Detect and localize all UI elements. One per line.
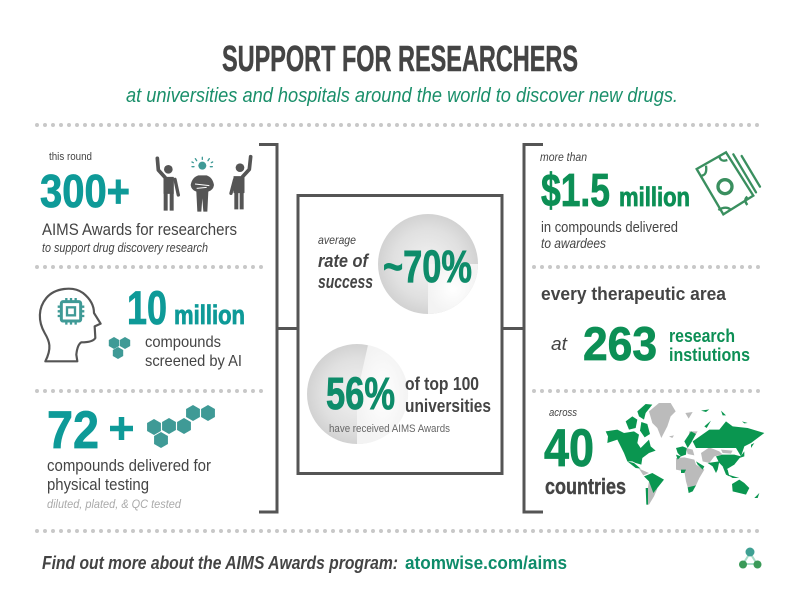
compounds delivered text: physical testing bbox=[47, 476, 149, 494]
map: americas bbox=[606, 403, 676, 505]
at label: at bbox=[551, 334, 568, 354]
icon: person left bbox=[157, 158, 178, 211]
research institutions: research bbox=[669, 326, 735, 346]
chart: 56% pie bbox=[307, 344, 408, 444]
received awards note: have received AIMS Awards bbox=[329, 423, 450, 435]
70 percent figure: ~70% bbox=[383, 241, 472, 292]
icon: person right bbox=[231, 157, 251, 209]
world map bbox=[606, 403, 764, 505]
compounds delivered text bbox=[47, 457, 211, 494]
million word: million bbox=[174, 300, 245, 330]
top 100 universities bbox=[405, 374, 491, 416]
icon: head with chip bbox=[40, 289, 101, 361]
dollar amount: $1.5 bbox=[541, 164, 610, 216]
icon: logo bbox=[739, 548, 762, 568]
center panel bbox=[298, 196, 502, 474]
compounds screened text: compounds bbox=[145, 334, 221, 351]
map: eurasia africa oceania bbox=[676, 409, 764, 498]
56 percent figure: 56% bbox=[326, 368, 395, 419]
title: SUPPORT FOR RESEARCHERS bbox=[222, 38, 578, 79]
72 number: 72 bbox=[47, 401, 99, 460]
panel: 72 compounds bbox=[47, 401, 215, 511]
drug discovery note: to support drug discovery research bbox=[42, 241, 208, 255]
panel: therapeutic area bbox=[541, 284, 750, 370]
panel: 40 countries bbox=[544, 403, 764, 505]
compounds delivered text: compounds delivered for bbox=[47, 457, 211, 475]
top 100 universities: universities bbox=[405, 396, 491, 416]
across label: across bbox=[549, 407, 577, 419]
more than label: more than bbox=[540, 150, 587, 164]
compounds delivered text: in compounds delivered bbox=[541, 220, 678, 236]
263 number: 263 bbox=[583, 317, 657, 370]
average rate of success: rate of bbox=[318, 251, 370, 271]
icon: hexagon chain bbox=[147, 405, 215, 448]
million word: million bbox=[619, 182, 690, 212]
plus sign bbox=[110, 417, 133, 440]
average rate of success: success bbox=[318, 272, 373, 292]
research institutions: instiutions bbox=[669, 345, 750, 365]
right bracket bbox=[502, 144, 543, 512]
icon: person center bbox=[191, 157, 214, 212]
this round label: this round bbox=[49, 151, 92, 163]
300+ number: 300+ bbox=[40, 165, 130, 217]
footer link: atomwise.com/aims bbox=[405, 553, 567, 573]
panel: 10 million bbox=[40, 281, 245, 370]
subtitle: at universities and hospitals around the world to discover new drugs. bbox=[126, 85, 678, 107]
research institutions bbox=[669, 326, 750, 365]
top 100 universities: of top 100 bbox=[405, 374, 479, 394]
footer call to action: Find out more about the AIMS Awards program: bbox=[42, 553, 398, 573]
panel: 300+ awards bbox=[40, 151, 251, 255]
compounds screened text: screened by AI bbox=[145, 353, 242, 370]
chart: 70% pie bbox=[378, 214, 478, 314]
left bracket bbox=[259, 144, 298, 512]
icon: researchers bbox=[157, 157, 251, 212]
every therapeutic area heading: every therapeutic area bbox=[541, 284, 727, 304]
average rate of success bbox=[318, 233, 373, 292]
icon: money bbox=[697, 152, 760, 214]
countries word: countries bbox=[545, 474, 626, 499]
AIMS awards text: AIMS Awards for researchers bbox=[42, 220, 237, 239]
40 number: 40 bbox=[544, 419, 594, 478]
icon: small hexagons bbox=[109, 337, 130, 359]
10 number: 10 bbox=[127, 281, 167, 334]
to awardees: to awardees bbox=[541, 235, 606, 251]
panel: $1.5 million bbox=[540, 150, 760, 251]
compounds screened text bbox=[145, 334, 242, 370]
average rate of success: average bbox=[318, 233, 356, 247]
testing note: diluted, plated, & QC tested bbox=[47, 497, 181, 511]
